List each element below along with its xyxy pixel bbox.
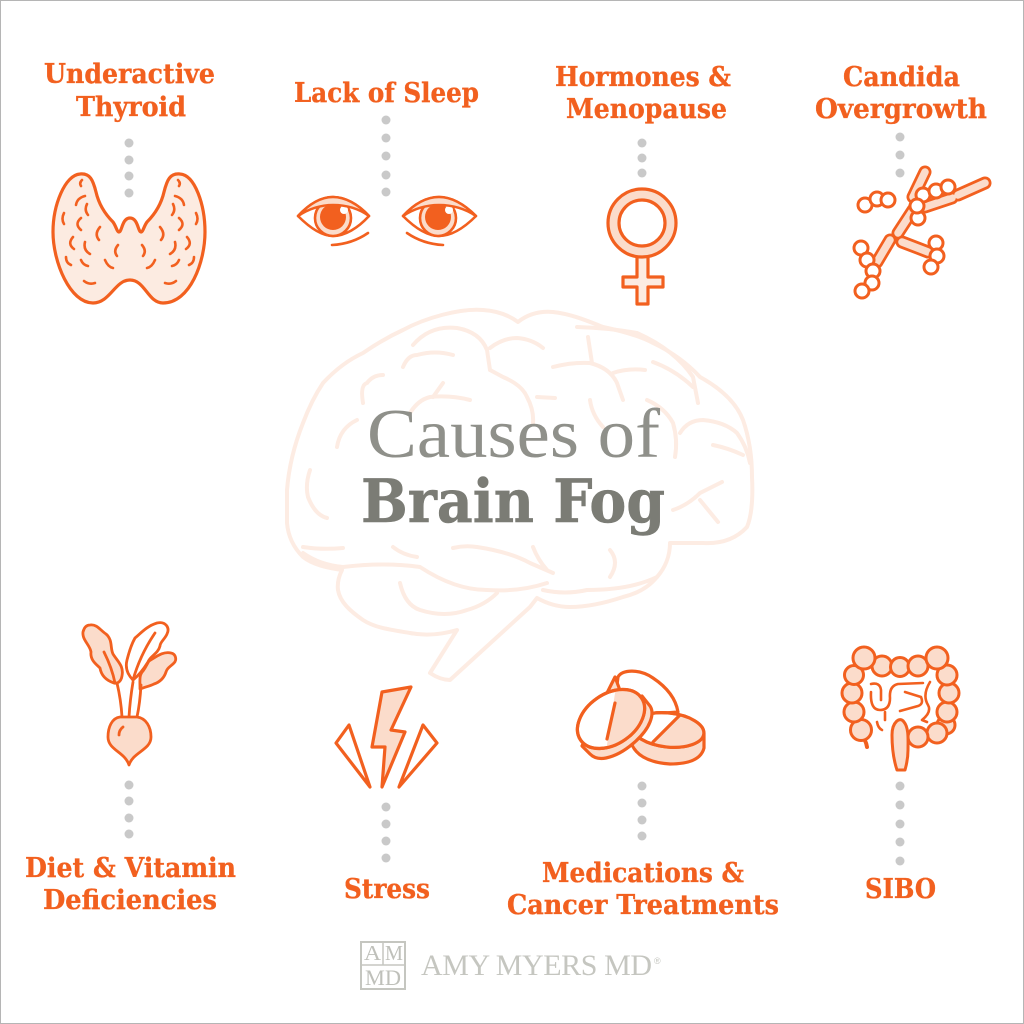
icon: candida yeast bbox=[854, 172, 985, 298]
label: Hormones & Menopause: Hormones & bbox=[555, 62, 731, 93]
label: Lack of Sleep: Lack of Sleep bbox=[294, 78, 479, 109]
title bbox=[361, 396, 665, 537]
icon: beet bbox=[83, 623, 176, 765]
logo: Amy Myers MD bbox=[361, 941, 661, 990]
label: Diet & Vitamin Deficiencies bbox=[25, 853, 236, 916]
label: Diet & Vitamin Deficiencies: Deficiencies bbox=[43, 885, 217, 916]
dots: stress connector bbox=[382, 802, 390, 862]
label: Hormones & Menopause bbox=[555, 62, 731, 125]
dots: sleep connector bbox=[382, 116, 390, 196]
label: SIBO: SIBO bbox=[865, 874, 936, 905]
dots: thyroid connector bbox=[124, 138, 134, 198]
label: Medications & Cancer Treatments bbox=[507, 858, 779, 921]
logo mark: M bbox=[385, 941, 403, 965]
dots: SIBO connector bbox=[896, 782, 904, 866]
icon: thyroid bbox=[53, 174, 205, 303]
label: Candida Overgrowth: Overgrowth bbox=[815, 94, 987, 125]
label: Diet & Vitamin Deficiencies: Diet & Vitamin bbox=[25, 853, 236, 884]
icon: female symbol bbox=[608, 189, 676, 304]
label: Stress: Stress bbox=[344, 874, 430, 905]
logo wordmark: AMY MYERS MD bbox=[421, 949, 652, 982]
dots: medications connector bbox=[638, 782, 646, 840]
label: Medications & Cancer Treatments: Cancer Treatments bbox=[507, 890, 779, 921]
dots: candida connector bbox=[896, 132, 904, 178]
label: Underactive Thyroid: Thyroid bbox=[76, 92, 186, 123]
logo mark: A bbox=[364, 941, 382, 965]
label: Underactive Thyroid bbox=[44, 59, 215, 123]
dots: beet connector bbox=[124, 780, 134, 838]
dots: hormones connector bbox=[638, 138, 646, 178]
label: Candida Overgrowth: Candida bbox=[843, 62, 960, 93]
background brain outline bbox=[287, 310, 752, 680]
icon: intestines bbox=[842, 647, 959, 770]
logo mark: MD bbox=[365, 965, 401, 990]
label: Hormones & Menopause: Menopause bbox=[566, 94, 727, 125]
label: Medications & Cancer Treatments: Medications & bbox=[542, 858, 744, 889]
right eye bbox=[403, 197, 476, 245]
left eye bbox=[298, 197, 369, 245]
title: Brain Fog bbox=[361, 467, 665, 537]
label: Underactive Thyroid: Underactive bbox=[44, 59, 215, 90]
logo: Amy Myers MD: ® bbox=[654, 956, 661, 966]
title: Causes of bbox=[367, 396, 661, 473]
label: Candida Overgrowth bbox=[815, 62, 987, 125]
icon: pills bbox=[566, 671, 706, 764]
icon: stress lightning bbox=[336, 687, 437, 787]
logo mark bbox=[361, 941, 405, 990]
icon: tired eyes bbox=[298, 197, 476, 245]
